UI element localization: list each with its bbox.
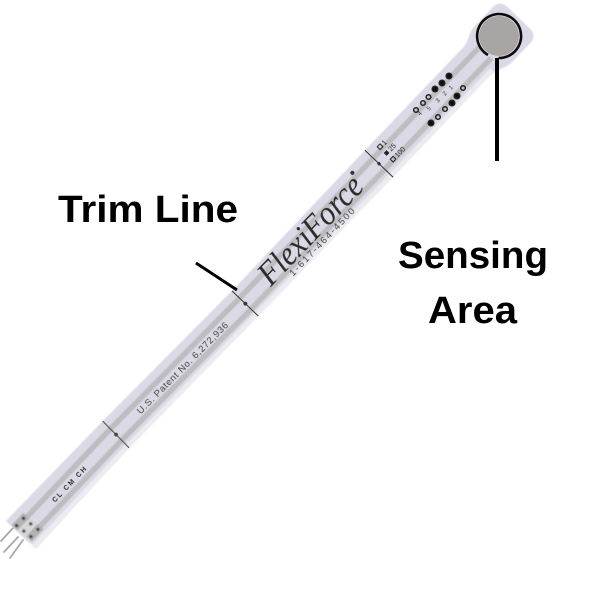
- option digits: 3: [435, 97, 442, 104]
- trim line 2: [231, 290, 259, 317]
- option digits: [417, 84, 455, 117]
- callout line: trim line: [196, 263, 237, 290]
- icon: connector pins: [1, 528, 23, 558]
- label: sensing: Sensing: [398, 235, 548, 277]
- label: area: Area: [428, 290, 518, 332]
- scale marks: 25: [388, 143, 398, 153]
- scale marks: 1: [381, 139, 389, 147]
- scale marks: [377, 134, 407, 164]
- scale marks: 100: [394, 146, 407, 159]
- lower row of option marks: [428, 86, 465, 126]
- terminal labels: CL CM CH: [51, 466, 88, 504]
- connector tabs: [12, 511, 44, 543]
- registered mark: [350, 170, 355, 176]
- patent text: U.S. Patent No. 6,272,936: [135, 320, 231, 417]
- upper row of option marks: [414, 73, 452, 112]
- sensing circle: [477, 14, 521, 58]
- callout line: sensing area: [495, 58, 499, 161]
- option digits: 4: [417, 110, 424, 117]
- option digits: 2: [442, 90, 449, 97]
- option digits: 1: [448, 84, 455, 91]
- phone number: 1-617-464-4500: [287, 206, 358, 279]
- brand name: FlexiForce: [249, 168, 371, 293]
- trim line 1: [101, 420, 130, 448]
- trim line 3: [364, 149, 394, 178]
- option marks: [414, 73, 465, 126]
- option digits: 5: [426, 105, 433, 112]
- label: trim line: Trim Line: [58, 189, 238, 231]
